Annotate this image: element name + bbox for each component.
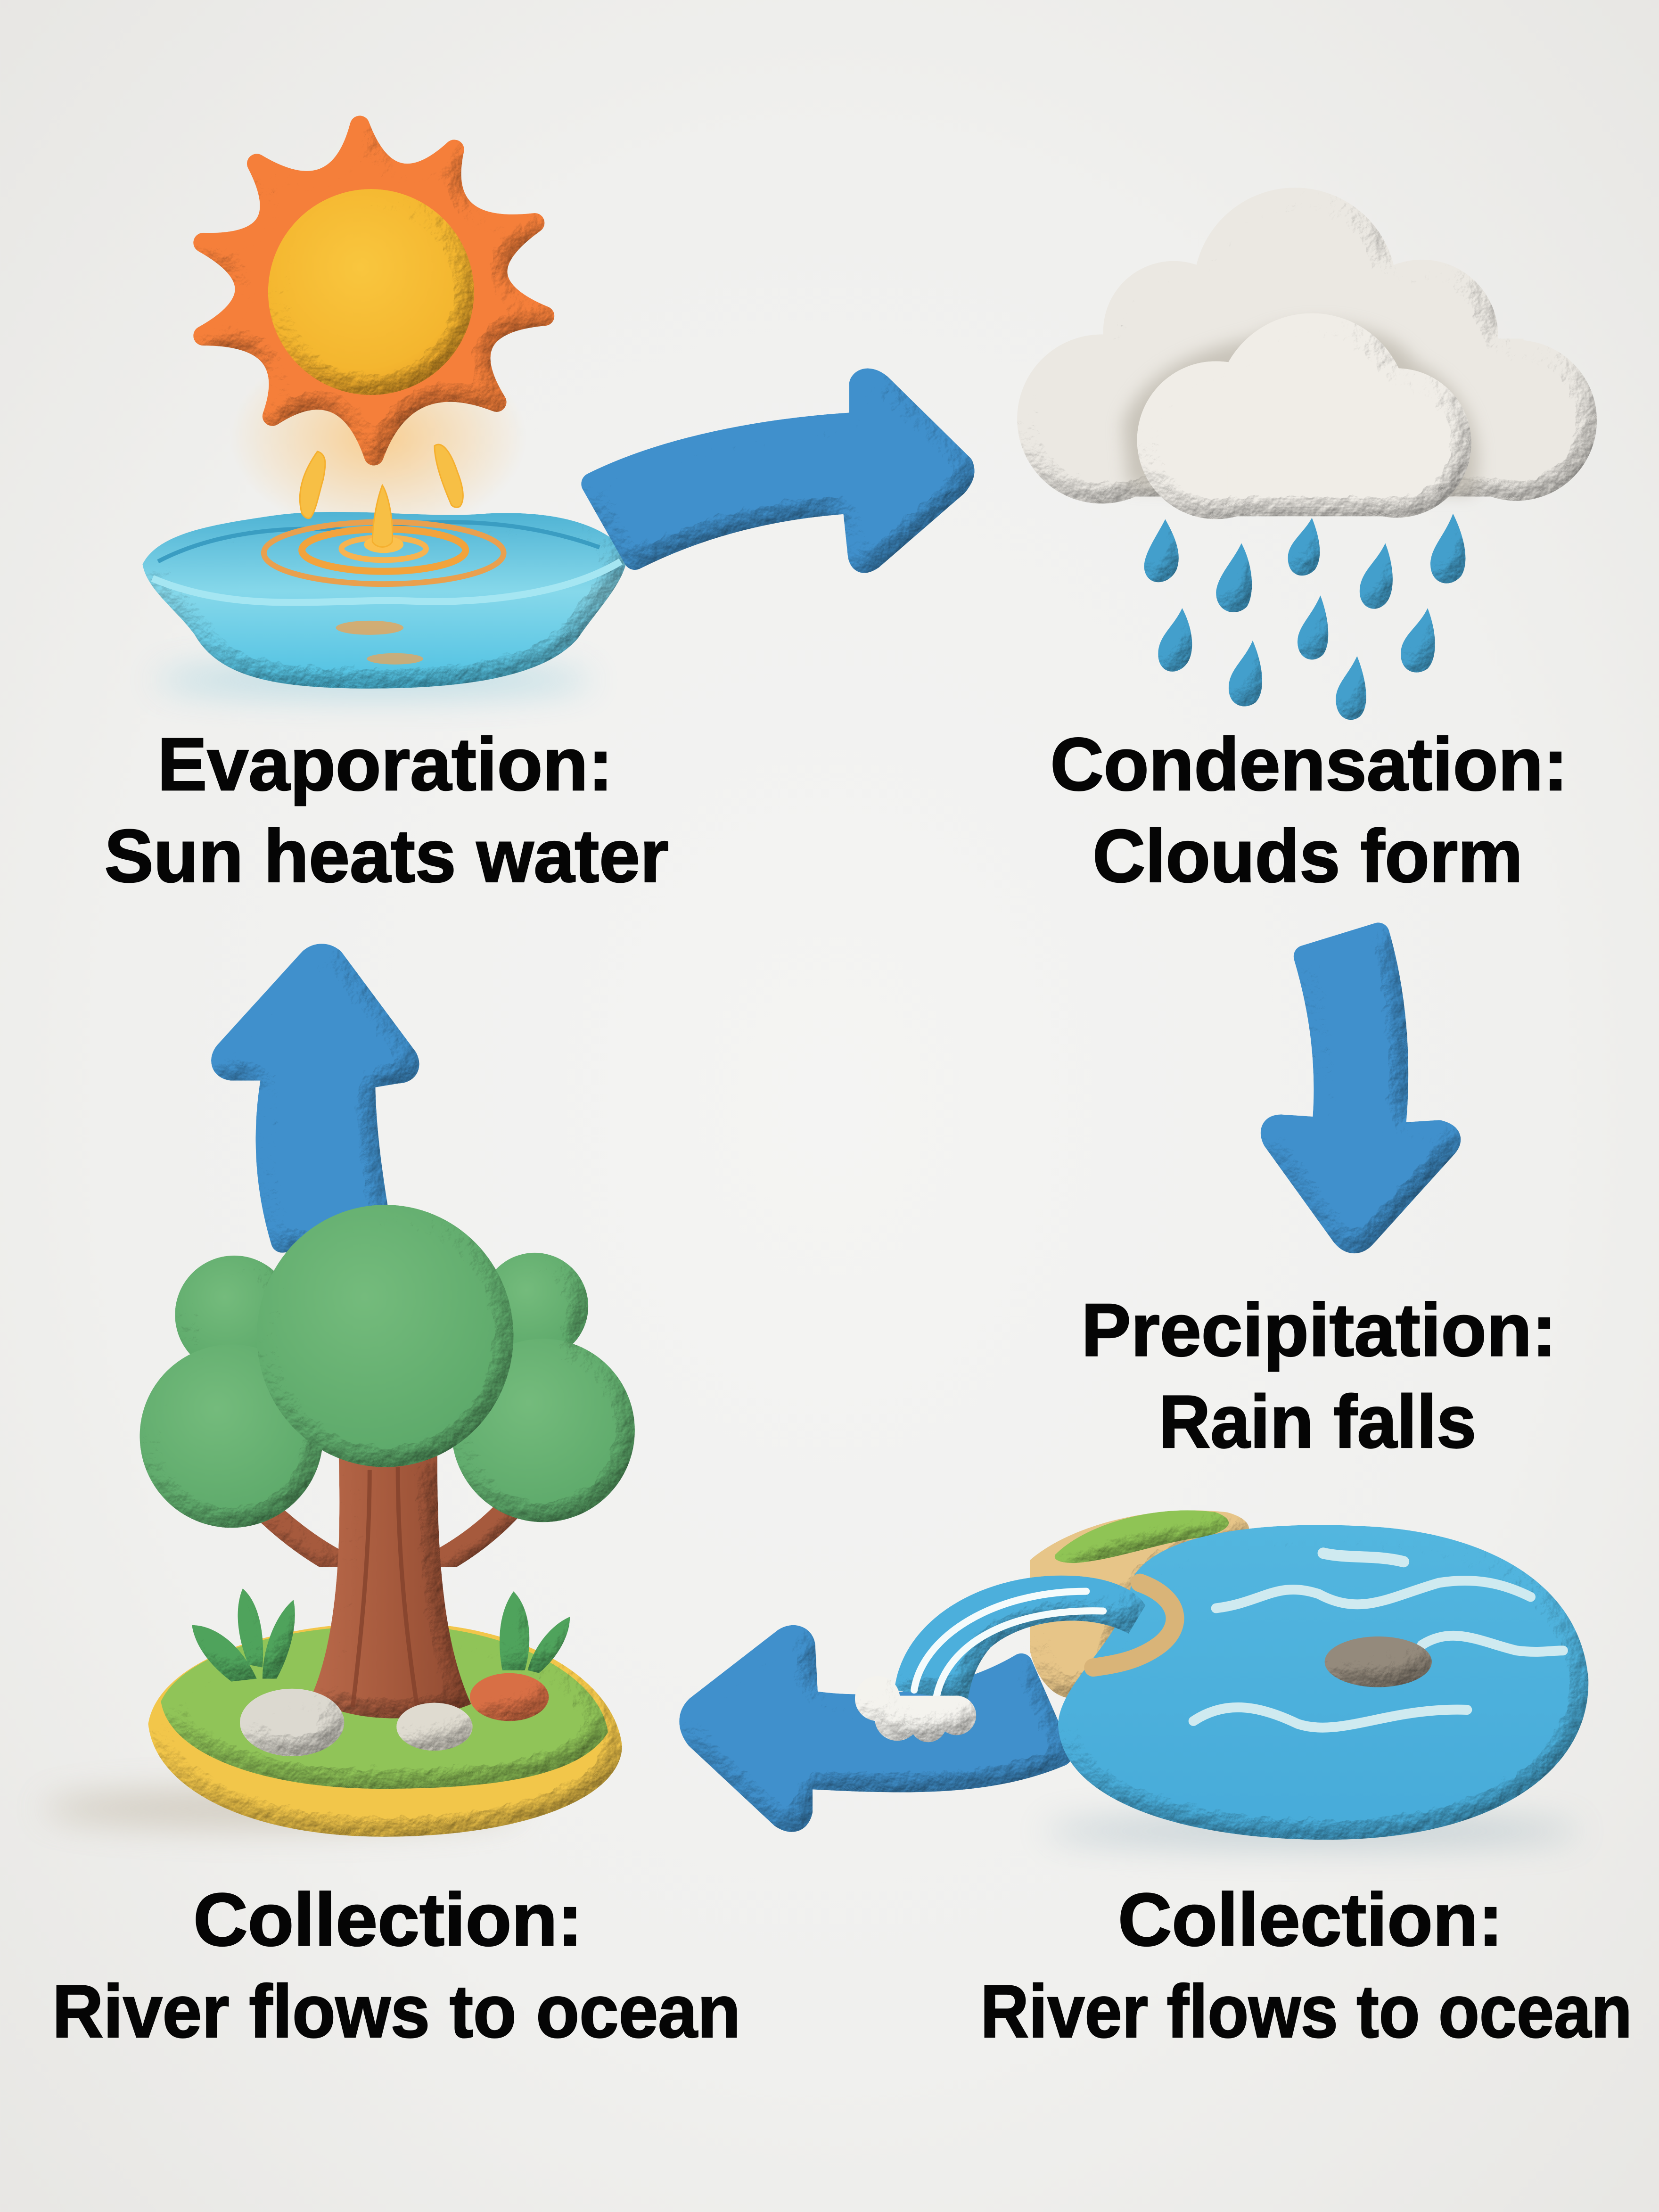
label: precipitation: [1081, 1288, 1557, 1464]
label: collection right: [980, 1877, 1632, 2053]
ocean disc: [1058, 1525, 1588, 1840]
label: collection left: [52, 1877, 740, 2053]
cloud back lobes: [1017, 188, 1597, 503]
main foliage: [257, 1205, 514, 1467]
land strip: [1030, 1510, 1249, 1699]
ocean rock: [1325, 1636, 1432, 1687]
label: condensation: Condensation:: [1050, 722, 1568, 806]
arrow: collection to evaporation: [222, 955, 408, 1242]
tree trunk: [311, 1453, 471, 1719]
raindrops: [1144, 513, 1466, 720]
label: evaporation: [105, 722, 669, 898]
river highlights: [914, 1591, 1103, 1696]
label: condensation: Clouds form: [1092, 814, 1523, 898]
island base: [148, 1622, 622, 1837]
icon: cloud with raindrops: [1017, 188, 1597, 720]
land grass: [1055, 1510, 1229, 1563]
river arch: [895, 1576, 1145, 1702]
label: collection left: Collection:: [193, 1877, 583, 1961]
tree branches: [263, 1504, 514, 1560]
vapour wisps: [300, 444, 463, 547]
shoreline: [1093, 1583, 1175, 1668]
label: precipitation: Precipitation:: [1081, 1288, 1557, 1372]
cloud front puff: [1137, 313, 1471, 519]
icon: ocean disc with river: [855, 1510, 1588, 1847]
stones: [240, 1673, 549, 1756]
tree foliage: [140, 1253, 635, 1528]
arrow: condensation to precipitation: [1272, 934, 1449, 1242]
sun core: [268, 189, 474, 395]
label: evaporation: Sun heats water: [105, 814, 669, 898]
arrow: evaporation to condensation: [592, 379, 963, 562]
label: condensation: [1050, 722, 1568, 898]
sun rays: [203, 125, 544, 456]
island grass: [161, 1625, 608, 1789]
ocean wave lines: [1193, 1553, 1563, 1727]
arrow: ocean to tree: [690, 1636, 1061, 1821]
label: evaporation: Evaporation:: [157, 722, 613, 806]
water surface ripples: [152, 522, 621, 602]
grass tufts: [192, 1588, 570, 1682]
label: collection right: Collection:: [1118, 1877, 1503, 1961]
icon: tree on grass island: [42, 1205, 635, 1837]
river foam: [855, 1676, 976, 1742]
label: collection left: River flows to ocean: [52, 1969, 740, 2053]
water dish: [142, 512, 628, 689]
icon: sun heating water dish: [142, 125, 628, 697]
label: precipitation: Rain falls: [1159, 1380, 1476, 1464]
cloud shading: [1123, 323, 1478, 494]
